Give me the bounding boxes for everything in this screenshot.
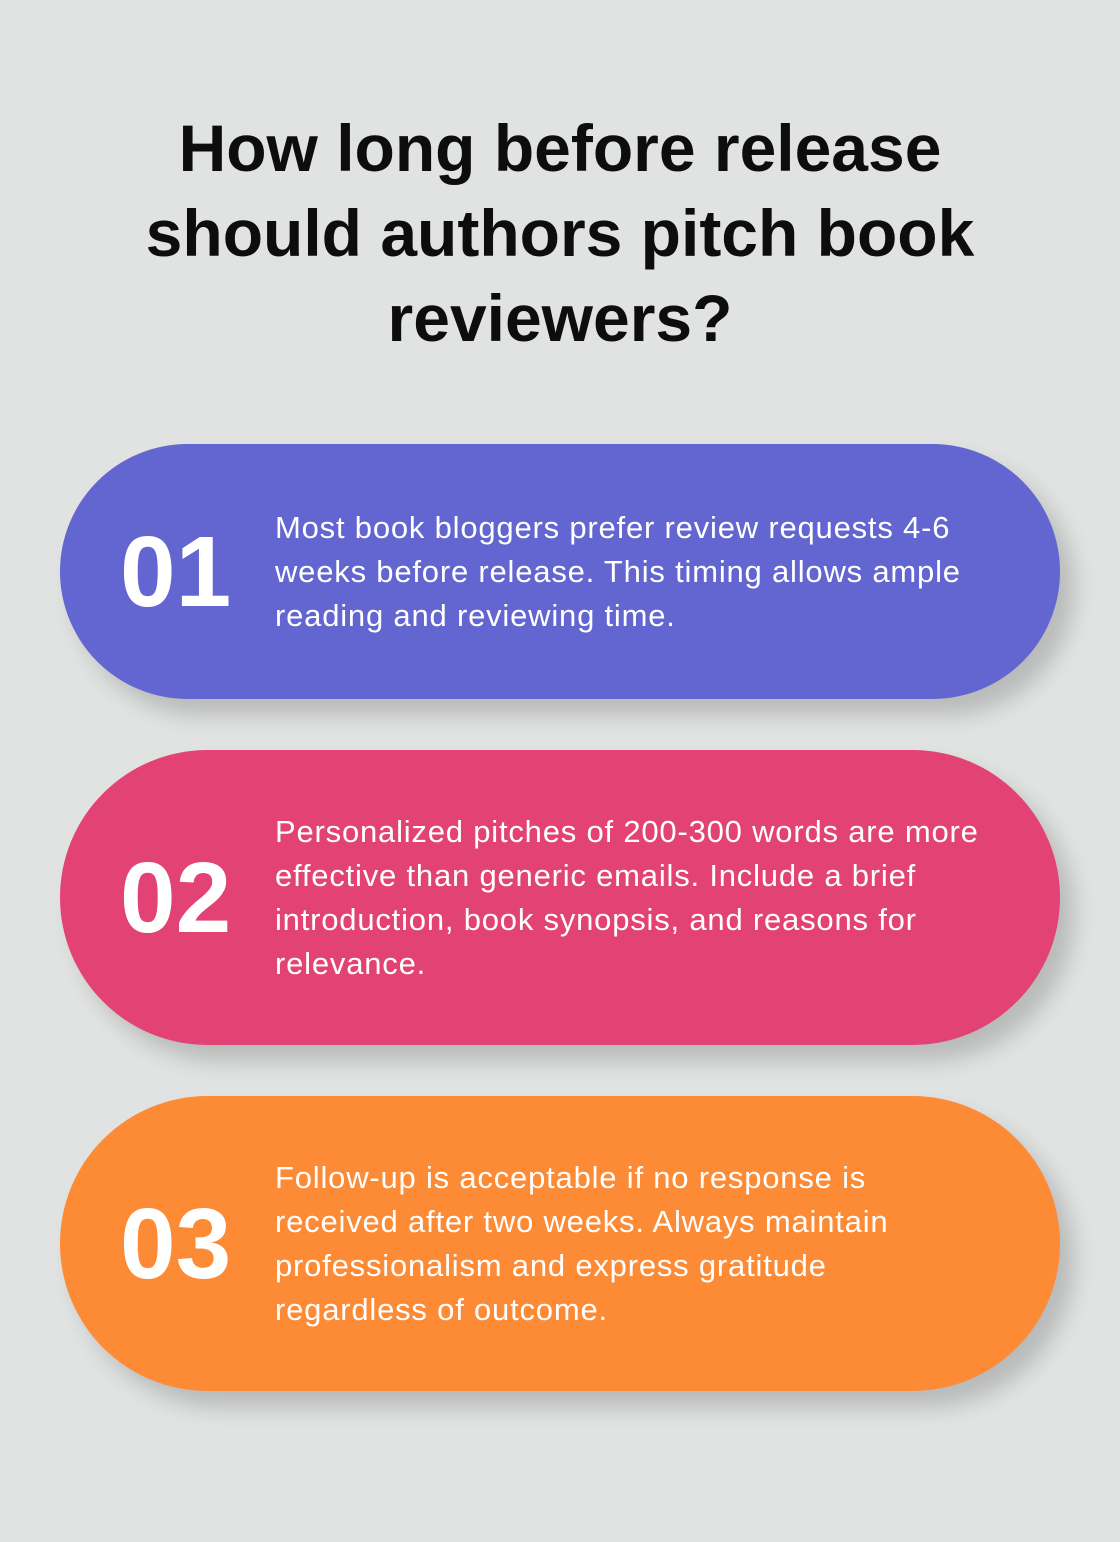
- number 01: 01: [120, 516, 231, 628]
- panel: step 01: [60, 444, 1060, 699]
- text: step 02: relevance.: [275, 946, 426, 981]
- text: step 03: Follow-up is acceptable if no response is: [275, 1160, 866, 1195]
- text: step 03: regardless of outcome.: [275, 1292, 608, 1327]
- text: step 02: introduction, book synopsis, and reasons for: [275, 902, 917, 937]
- title: [146, 111, 974, 355]
- text: step 02: [275, 814, 979, 981]
- text: step 02: Personalized pitches of 200-300 words are more: [275, 814, 979, 849]
- text: step 01: Most book bloggers prefer review requests 4-6: [275, 510, 950, 545]
- title: How long before release: [179, 111, 941, 185]
- title: should authors pitch book: [146, 196, 974, 270]
- text: step 01: reading and reviewing time.: [275, 598, 676, 633]
- title: reviewers?: [388, 281, 732, 355]
- panel: step 02: [60, 750, 1060, 1045]
- text: step 03: received after two weeks. Always maintain: [275, 1204, 888, 1239]
- text: step 01: weeks before release. This timing allows ample: [275, 554, 961, 589]
- panel: step 03: [60, 1096, 1060, 1391]
- text: step 03: [275, 1160, 888, 1327]
- text: step 02: effective than generic emails. Include a brief: [275, 858, 916, 893]
- number 02: 02: [120, 842, 231, 954]
- text: step 01: [275, 510, 961, 633]
- text: step 03: professionalism and express gratitude: [275, 1248, 827, 1283]
- number 03: 03: [120, 1188, 231, 1300]
